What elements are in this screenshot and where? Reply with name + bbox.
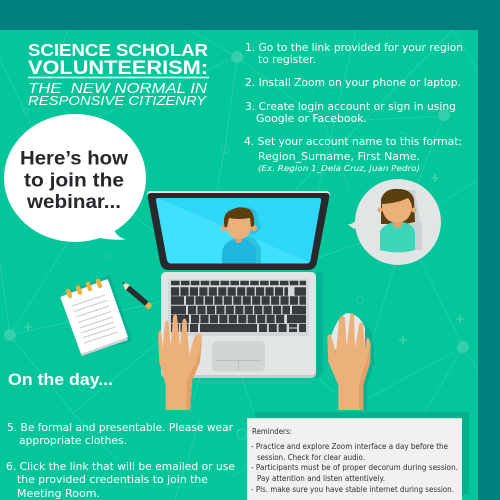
steps 1 to 4: 1. Go to the link provided for your region	[245, 42, 463, 54]
panel: reminders: session. Check for clear audio.	[257, 453, 365, 462]
steps 1 to 4	[244, 42, 463, 173]
steps 1 to 4: (Ex. Region 1_Dela Cruz, Juan Pedro)	[258, 164, 420, 173]
steps 5 and 6: appropriate clothes.	[19, 435, 127, 447]
steps 1 to 4: to register.	[258, 54, 316, 66]
steps 1 to 4: 2. Install Zoom on your phone or laptop.	[245, 77, 461, 89]
steps 5 and 6: Meeting Room.	[17, 488, 100, 500]
icon: mouse and right hand	[327, 313, 375, 410]
panel: reminders: - Participants must be of proper decorum during session.	[251, 463, 458, 472]
icon: notepad	[61, 275, 132, 356]
speech bubble: here's how	[4, 114, 146, 242]
panel: reminders: - Pls. make sure you have stable internet during session.	[251, 485, 454, 494]
panel: reminders	[247, 412, 469, 500]
panel: reminders: Pay attention and listen attentively.	[257, 474, 385, 483]
steps 5 and 6: 6. Click the link that will be emailed or use	[6, 461, 235, 473]
illustration: laptop	[147, 191, 330, 378]
title: SCIENCE SCHOLAR	[28, 40, 208, 60]
heading: on the day: On the day...	[8, 371, 113, 389]
steps 5 and 6: the provided credentials to join the	[17, 474, 208, 486]
icon: pen	[122, 282, 150, 308]
steps 1 to 4: 3. Create login account or sign in using	[245, 101, 456, 113]
panel: reminders: - Practice and explore Zoom interface a day before the	[251, 442, 448, 451]
speech bubble: here's how: webinar...	[26, 192, 121, 213]
panel: reminders: Reminders:	[252, 427, 292, 436]
title	[28, 40, 209, 108]
title: VOLUNTEERISM:	[28, 57, 208, 79]
steps 1 to 4: Google or Facebook.	[256, 113, 367, 125]
title: THE NEW NORMAL IN	[28, 81, 208, 97]
icon: left hand	[158, 314, 202, 410]
speech bubble: participant woman	[348, 179, 441, 265]
speech bubble: here's how: Here’s how	[20, 148, 128, 170]
steps 1 to 4: Region_Surname, First Name.	[258, 151, 420, 163]
title: RESPONSIVE CITIZENRY	[28, 93, 207, 108]
steps 1 to 4: 4. Set your account name to this format:	[244, 136, 462, 148]
steps 5 and 6: 5. Be formal and presentable. Please wear	[7, 422, 234, 434]
steps 5 and 6	[6, 422, 235, 500]
speech bubble: here's how: to join the	[24, 170, 124, 192]
